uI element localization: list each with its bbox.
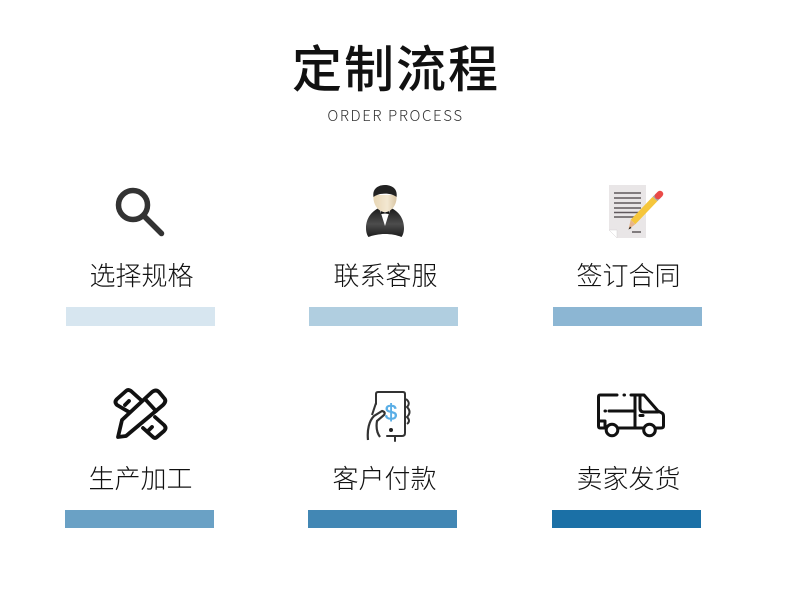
label: sign contract: 签订合同	[576, 261, 681, 291]
label: contact service: 联系客服	[333, 261, 438, 291]
icon: customer service man	[366, 185, 404, 237]
dollar sign: $	[385, 400, 397, 425]
bar: step 4	[65, 510, 214, 528]
bar: step 2	[309, 307, 458, 326]
icon: phone payment	[368, 392, 410, 441]
step 2: contact service	[309, 185, 458, 326]
subtitle: ORDER PROCESS	[327, 105, 464, 126]
label: production: 生产加工	[88, 464, 193, 494]
bar: step 6	[552, 510, 701, 528]
label: select specification: 选择规格	[89, 261, 194, 291]
step 6: seller ships	[552, 395, 701, 528]
bar: step 5	[308, 510, 457, 528]
step 3: sign contract	[553, 185, 702, 326]
phone home dot	[389, 428, 393, 432]
icon: delivery van	[598, 395, 664, 436]
bar: step 3	[553, 307, 702, 326]
label: seller ships: 卖家发货	[576, 464, 681, 494]
label: customer payment: 客户付款	[332, 464, 437, 494]
icon: magnifying glass	[118, 190, 162, 234]
title: 定制流程	[292, 30, 500, 102]
step 5: customer payment	[308, 392, 457, 528]
step 1: select specification	[66, 190, 215, 326]
icon: pencil and ruler	[116, 390, 166, 438]
icon: contract and pencil	[609, 185, 660, 238]
step 4: production	[65, 390, 214, 528]
bar: step 1	[66, 307, 215, 326]
